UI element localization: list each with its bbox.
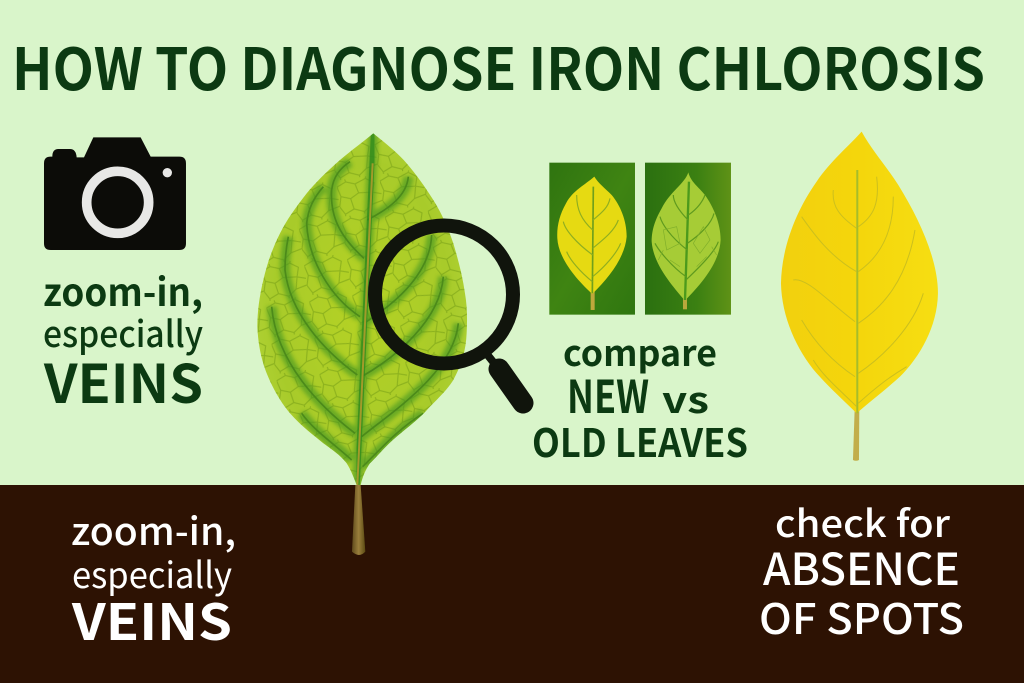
small green leaf [652, 172, 721, 301]
text: check for absence of spots: check for [775, 494, 951, 548]
leaf stem [352, 485, 365, 555]
text: zoom-in especially veins (upper left): especially [43, 306, 203, 358]
text: compare new vs old leaves: compare [563, 325, 717, 377]
small leaf veins [655, 182, 718, 300]
icon: camera [44, 137, 186, 250]
text: compare new vs old leaves: NEW [567, 361, 649, 426]
leaf veins and reticulation [253, 130, 473, 487]
leaf blade [781, 132, 938, 413]
text: zoom-in especially veins (soil): especially [72, 547, 232, 599]
small leaf stem [683, 297, 687, 309]
small leaf veins [563, 187, 621, 293]
large yellow leaf [781, 132, 938, 461]
text: check for absence of spots: OF SPOTS [759, 586, 964, 647]
small yellow leaf [557, 177, 627, 294]
main chlorotic leaf [253, 130, 473, 555]
background [0, 0, 1024, 486]
text: zoom-in especially veins (soil) [71, 501, 236, 655]
text: compare new vs old leaves [532, 325, 748, 469]
leaf stem [853, 410, 859, 461]
text: zoom-in especially veins (upper left): zoom-in, [43, 262, 203, 317]
panel: yellow new leaf [549, 163, 635, 315]
icon: magnifying glass [375, 226, 523, 403]
text: zoom-in especially veins (upper left) [43, 262, 203, 419]
soil band [0, 485, 1024, 683]
text: compare new vs old leaves: OLD LEAVES [532, 413, 748, 469]
text: zoom-in especially veins (upper left): VEINS [43, 343, 203, 419]
panel: pale green old leaf [645, 163, 731, 315]
text: zoom-in especially veins (soil): VEINS [71, 583, 232, 655]
leaf veins [793, 170, 923, 413]
text: zoom-in especially veins (soil): zoom-in, [71, 501, 236, 556]
text: compare new vs old leaves: vs [662, 372, 709, 424]
text: check for absence of spots [759, 494, 964, 647]
small leaf stem [591, 292, 595, 310]
text: check for absence of spots: ABSENCE [763, 534, 960, 598]
leaf blade [257, 133, 467, 485]
